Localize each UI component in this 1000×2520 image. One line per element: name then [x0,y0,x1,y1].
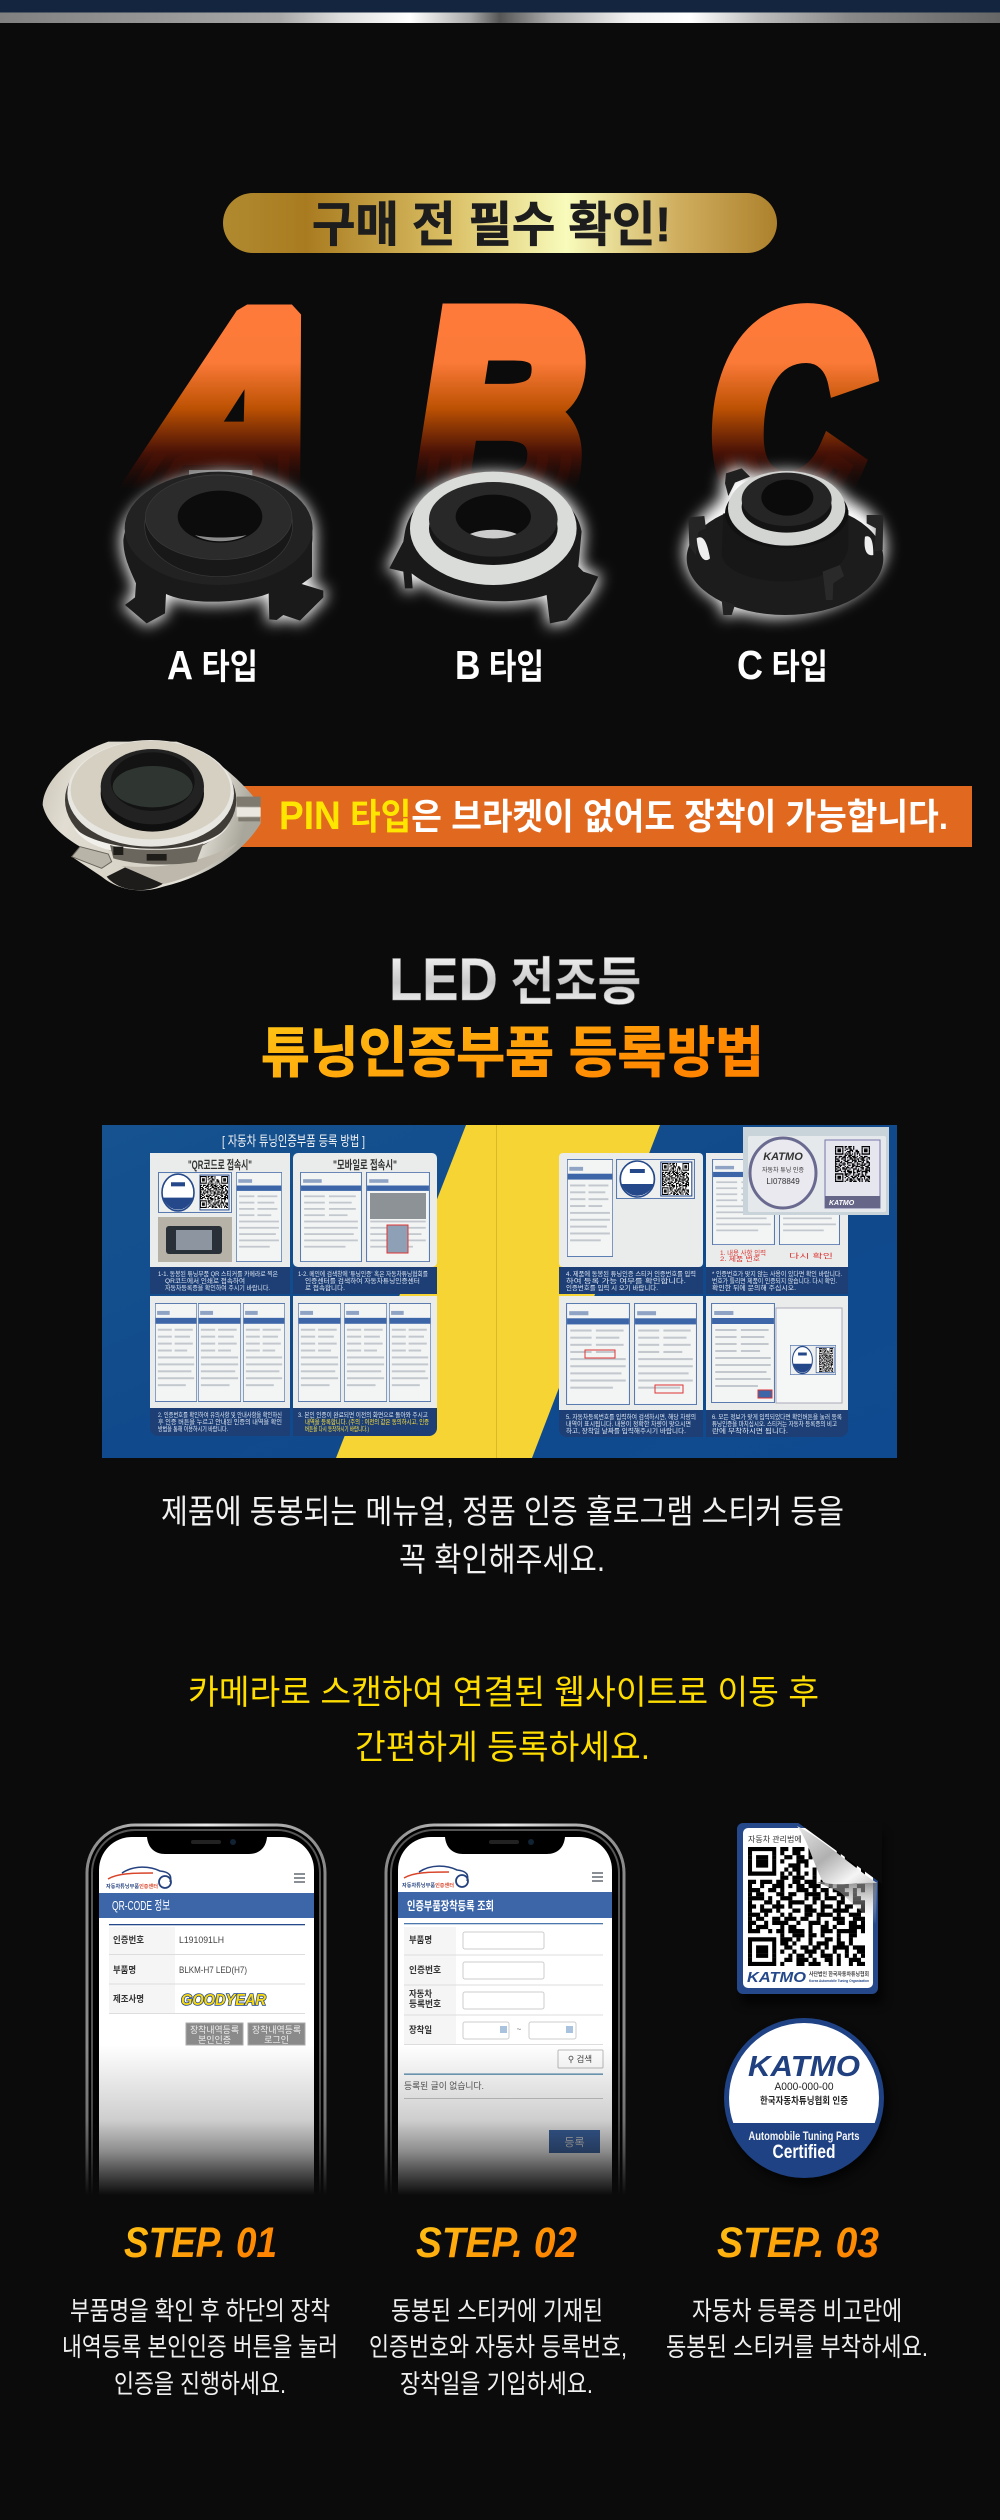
manual panel 2 [293,1153,437,1294]
manual inset: hologram sticker: KATMO [829,1200,855,1207]
sticker: QR with peeled corner: 자동차 관리법에 [748,1834,802,1844]
manual panel 3: 후 인증 버튼을 누르고 안내된 인증의 내역을 확인 [158,1417,282,1426]
manual panel 4 [293,1296,437,1436]
register button [549,2130,600,2153]
paragraph: check included manual and sticker [161,1493,844,1578]
big letter C: C [712,259,867,574]
manual panel 7: 내역이 표시됩니다. 내용이 정확한 차량이 맞으시면 [566,1419,691,1428]
hamburger menu [294,1874,305,1882]
manual inset: hologram sticker [743,1127,889,1215]
manual panel 6: 확인한 뒤에 문의해 주십시오. [712,1283,796,1292]
photo: registration manual [102,1125,897,1458]
manual panel 6: 다시 확인 [789,1251,833,1260]
heading pill: must check before purchase [223,193,777,253]
manual panel 7: 5. 자동차등록번호를 입력하여 검색하시면, 해당 차량의 [566,1412,696,1421]
manual panel 2: 인증센터를 검색하여 자동차튜닝인증센터 [305,1276,420,1285]
step 3 text [666,2296,928,2362]
manual panel 6: 2. 제품 번호 [720,1254,760,1263]
callout bar: PIN type [240,786,972,847]
info table: BLKM-H7 LED(H7) [179,1965,247,1975]
manual panel 6: 번호가 틀리면 제품이 인증되지 않습니다. 다시 확인. [712,1276,837,1285]
manual panel 3 [150,1296,290,1436]
manual panel 1 [150,1153,290,1294]
top silver gradient strip [0,12,1000,23]
step 1 title: STEP. 01 [124,2219,277,2267]
form table: 등록번호 [409,1998,441,2009]
paragraph: scan with camera: 카메라로 스캔하여 연결된 웹사이트로 이동 후 [188,1674,819,1712]
search button [558,2050,603,2068]
manual inset: hologram sticker: LI078849 [766,1177,800,1186]
manual panel 2: "모바일로 접속시" [333,1158,397,1172]
manual panel 1: 자동차등록증을 확인하여 주시기 바랍니다. [165,1283,270,1292]
sticker: QR with peeled corner: KATMO [747,1969,806,1986]
empty result row: 등록된 글이 없습니다. [404,2080,484,2091]
step 1 text: 인증을 진행하세요. [114,2369,286,2399]
search button: ⚲ 검색 [568,2054,592,2064]
badge: certified hologram [724,2018,888,2184]
manual panel 4: 내역을 등록합니다. (주의 : 이전의 값은 동의하시고, 인증 [305,1417,429,1426]
heading: LED headlight: LED 전조등 [389,946,641,1013]
form table: 인증번호 [409,1964,441,1975]
phone: QR-CODE info screen [82,1825,332,2205]
badge: certified hologram: KATMO [748,2051,860,2083]
buttons: 장착내역등록 [190,2025,239,2035]
register button: 등록 [564,2136,585,2149]
form table: 장착일 [409,2024,432,2035]
paragraph: check included manual and sticker: 제품에 동봉되는 메뉴얼, 정품 인증 홀로그램 스티커 등을 [161,1493,844,1530]
manual panel 5: 4. 제품에 동봉된 튜닝인증 스티커 인증번호를 입력 [566,1269,696,1278]
header bar [99,1893,314,1918]
step 1 text [62,2296,338,2399]
manual panel 8 [706,1296,848,1437]
photo: type A adapter [123,470,323,623]
manual inset: hologram sticker: KATMO [763,1151,803,1163]
label: A type: A 타입 [167,642,258,688]
manual panel 4: 3. 본인 인증이 완료되면 이전의 화면으로 돌아와 주시고 [298,1410,428,1419]
form table: ~ [517,2025,522,2034]
manual panel 1: 1-1. 동봉된 튜닝부품 QR 스티커를 카메라로 찍은 [158,1269,278,1278]
form table: 자동차 [409,1988,433,1999]
top navy strip [0,0,1000,12]
manual inset: hologram sticker: 자동차 튜닝 인증 [762,1166,804,1174]
manual panel 5 [559,1153,703,1294]
header bar [398,1892,612,1918]
manual panel 3: 방법을 통해 이용하시기 바랍니다. [158,1424,228,1433]
manual panel 6 [706,1153,848,1294]
manual panel 5: 인증번호를 입력 시 오기 바랍니다. [566,1283,658,1292]
hamburger menu [592,1873,603,1881]
paragraph: check included manual and sticker: 꼭 확인해주세요. [399,1541,605,1578]
badge: certified hologram: 한국자동차튜닝협회 인증 [760,2095,848,2107]
sticker: QR with peeled corner [737,1822,883,2004]
site logo: 자동차튜닝부품인증센터 [106,1883,158,1890]
badge: certified hologram: A000-000-00 [774,2081,834,2093]
site logo: 자동차튜닝부품인증센터 [402,1882,454,1889]
buttons: 본인인증 [198,2035,231,2045]
step 3 title: STEP. 03 [717,2219,879,2267]
manual panel 6: 1. 내용 사항 입력 [720,1248,766,1257]
manual panel 2: 1-2. 메인에 검색창에 '튜닝인증' 혹은 자동차튜닝협회를 [298,1269,428,1278]
photo: type C adapter [687,468,883,615]
big letter B: B [416,254,584,578]
info table: GOODYEAR [181,1992,266,2009]
manual panel 6: * 인증번호가 맞지 않는 사용이 있다면 확인 바랍니다. [712,1269,842,1278]
phone: certified part registration lookup screen [380,1825,630,2205]
paragraph: scan with camera: 간편하게 등록하세요. [355,1729,650,1767]
info table: 인증번호 [113,1934,144,1945]
heading pill: must check before purchase: 구매 전 필수 확인! [312,199,671,252]
heading: tuning certified parts registration method: 튜닝인증부품 등록방법 [261,1022,764,1084]
manual panel 5: 하여 등록 가능 여부를 확인합니다. [566,1276,686,1285]
photo: type B adapter [389,472,598,623]
callout bar: PIN type: PIN 타입은 브라켓이 없어도 장착이 가능합니다. [279,794,948,838]
buttons: 장착내역등록 [252,2025,301,2035]
site logo [402,1866,468,1889]
step 1 text: 내역등록 본인인증 버튼을 눌러 [62,2332,338,2362]
manual panel 8: 란에 부착하시면 됩니다. [712,1426,788,1435]
header bar: QR-CODE 정보 [112,1898,170,1913]
step 3 text: 동봉된 스티커를 부착하세요. [666,2332,928,2362]
manual panel 4: 버튼을 다시 동작하시기 바랍니다.) [305,1424,369,1433]
badge: certified hologram: Automobile Tuning Parts [748,2129,860,2143]
manual panel 8: 튜닝인증을 마치십시오. 스티커는 자동차 등록증의 비고 [712,1419,837,1428]
header bar: 인증부품장착등록 조회 [407,1898,494,1913]
manual panel 7: 하고, 장착일 날짜를 입력해주시기 바랍니다. [566,1426,686,1435]
manual panel 3: 2. 인증번호를 확인하여 유의사항 및 안내사항을 확인하신 [158,1410,282,1419]
step 1 text: 부품명을 확인 후 하단의 장착 [70,2296,330,2326]
label: C type: C 타입 [737,642,828,688]
label: B type: B 타입 [455,642,544,688]
info table: L191091LH [179,1935,224,1945]
paragraph: scan with camera [188,1674,819,1767]
badge: certified hologram: Certified [772,2142,836,2163]
manual panel 8: 6. 모든 정보가 맞게 입력되었다면 확인버튼을 눌러 등록 [712,1412,842,1421]
buttons [186,2023,305,2045]
manual panel 1: "QR코드로 접속시" [188,1158,252,1172]
info table: 제조사명 [113,1993,144,2004]
form table: 부품명 [409,1934,432,1945]
manual panel 2: 로 접속합니다. [305,1283,345,1292]
step 2 text: 동봉된 스티커에 기재된 [391,2296,603,2326]
site logo [106,1867,171,1890]
step 2 text [369,2296,627,2399]
info table: 부품명 [113,1964,136,1975]
manual panel 7 [559,1296,703,1437]
step 2 text: 인증번호와 자동차 등록번호, [369,2332,627,2362]
buttons: 로그인 [264,2035,289,2045]
sticker: QR with peeled corner: Korea Automobile Tuning Organization [809,1978,869,1983]
manual panel 1: QR코드에서 인쇄로 접속하여 [165,1276,245,1285]
manual title: [ 자동차 튜닝인증부품 등록 방법 ] [222,1133,365,1149]
step 2 title: STEP. 02 [416,2219,577,2267]
form table [404,1923,603,2044]
photo: PIN type adapter [43,740,261,890]
sticker: QR with peeled corner: 사단법인 한국자동차튜닝협회 [809,1970,869,1978]
big letter A: A [100,254,350,578]
info table [109,1924,305,2014]
step 3 text: 자동차 등록증 비고란에 [692,2296,902,2326]
step 2 text: 장착일을 기입하세요. [400,2369,593,2399]
